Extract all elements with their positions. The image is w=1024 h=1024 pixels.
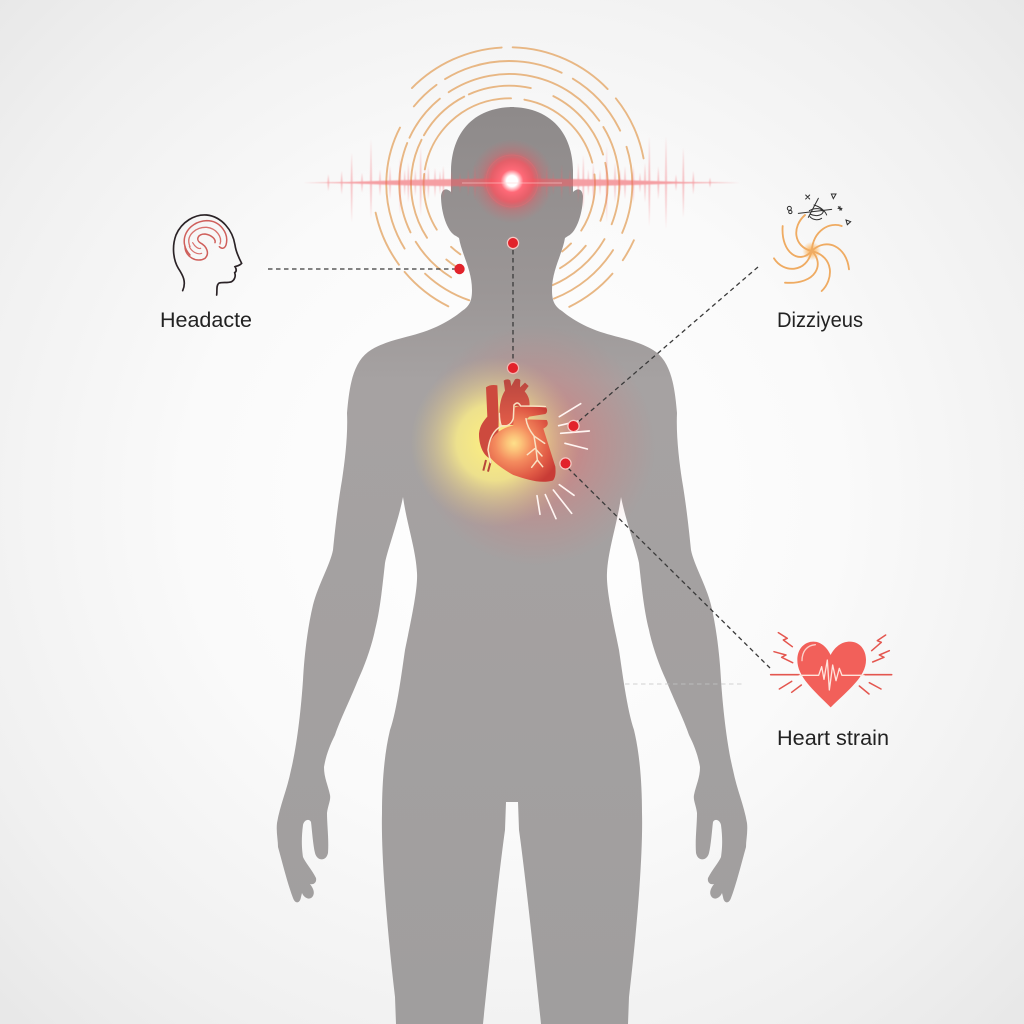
heart illustration bbox=[479, 379, 589, 519]
label: Heart strain bbox=[777, 727, 889, 750]
headache callout bbox=[160, 215, 252, 332]
pain rays bbox=[537, 404, 589, 519]
marker dots bbox=[454, 237, 579, 469]
pain waveform bbox=[303, 136, 740, 229]
dizziness callout bbox=[774, 194, 863, 332]
heart strain callout bbox=[771, 633, 892, 750]
ventricle bbox=[488, 406, 556, 482]
connector lines bbox=[268, 250, 770, 684]
right atrium and vena cava bbox=[479, 385, 499, 458]
icon: heart with pulse bbox=[771, 633, 892, 707]
vena cava stubs bbox=[483, 460, 491, 472]
strain bolts bbox=[774, 633, 889, 694]
concentric pain rings bbox=[328, 3, 690, 365]
icon: head with spiral bbox=[174, 215, 242, 295]
coronary vessels bbox=[488, 403, 545, 467]
dizzy sketch marks bbox=[787, 194, 851, 225]
chest glow bbox=[410, 325, 655, 565]
head pain focal glow bbox=[462, 139, 562, 223]
label: Dizziyeus bbox=[777, 309, 863, 332]
icon: swirl bbox=[774, 194, 851, 291]
aortic arch and vessels bbox=[499, 379, 530, 425]
label: Headacte bbox=[160, 309, 252, 332]
silhouette left half bbox=[277, 107, 514, 1024]
human body silhouette bbox=[277, 107, 747, 1024]
silhouette right half bbox=[510, 107, 747, 1024]
